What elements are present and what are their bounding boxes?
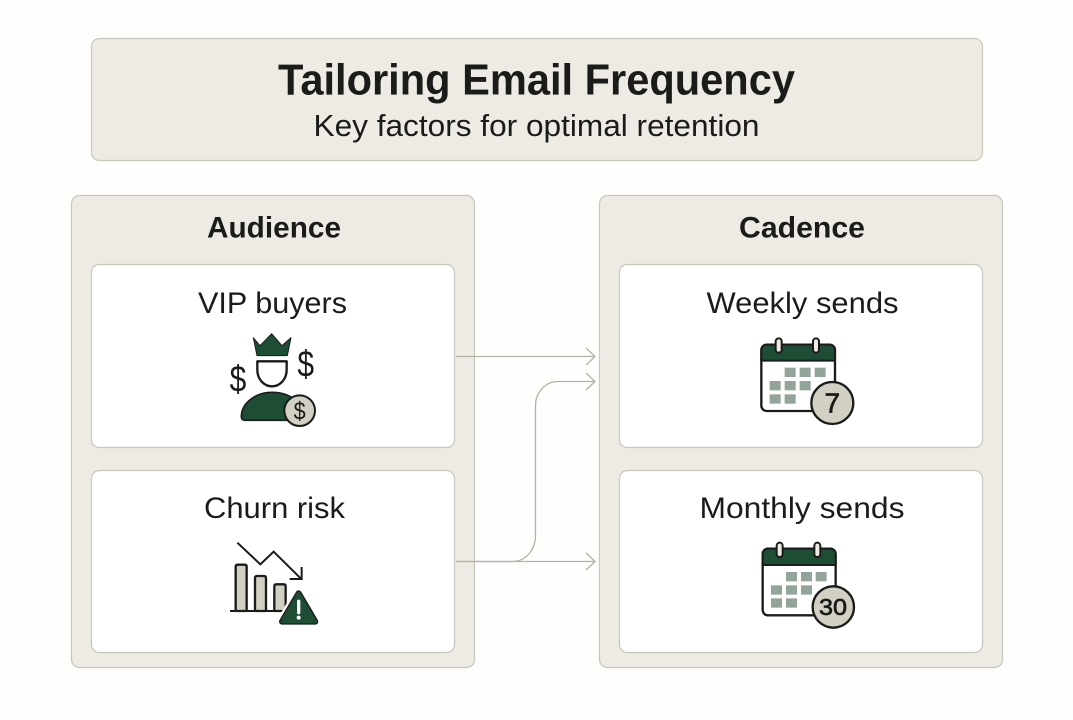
label: weekly sends: Weekly sends [706,287,898,320]
card: VIP buyers [92,264,454,448]
arrow: VIP buyers to weekly sends [456,348,595,365]
icon: falling bars with warning [230,543,315,622]
icon: calendar with 7: 7 [825,388,840,419]
card: weekly sends [620,264,982,448]
title: Tailoring Email Frequency [278,56,795,104]
audience heading: Audience [207,212,341,244]
icon: calendar with 30 [763,543,854,628]
arrow: churn risk to monthly sends [456,553,595,570]
panel: cadence [600,196,1002,668]
cadence heading: Cadence [739,212,865,244]
subtitle: Key factors for optimal retention [314,109,760,143]
icon: VIP crown person with dollars [230,334,315,426]
icon: calendar with 30: 30 [819,594,847,620]
title banner [92,38,982,160]
icon: VIP crown person with dollars: $ [230,358,247,400]
icon: VIP crown person with dollars: $ [297,343,314,385]
label: churn risk: Churn risk [204,492,345,525]
label: VIP buyers: VIP buyers [198,287,347,320]
arrow: churn risk to weekly sends [456,373,595,562]
card: churn risk [92,470,454,652]
icon: calendar with 7 [761,338,853,424]
panel: audience [72,196,474,668]
icon: VIP crown person with dollars: $ [294,397,306,425]
card: monthly sends [620,470,982,652]
label: monthly sends: Monthly sends [700,492,904,525]
